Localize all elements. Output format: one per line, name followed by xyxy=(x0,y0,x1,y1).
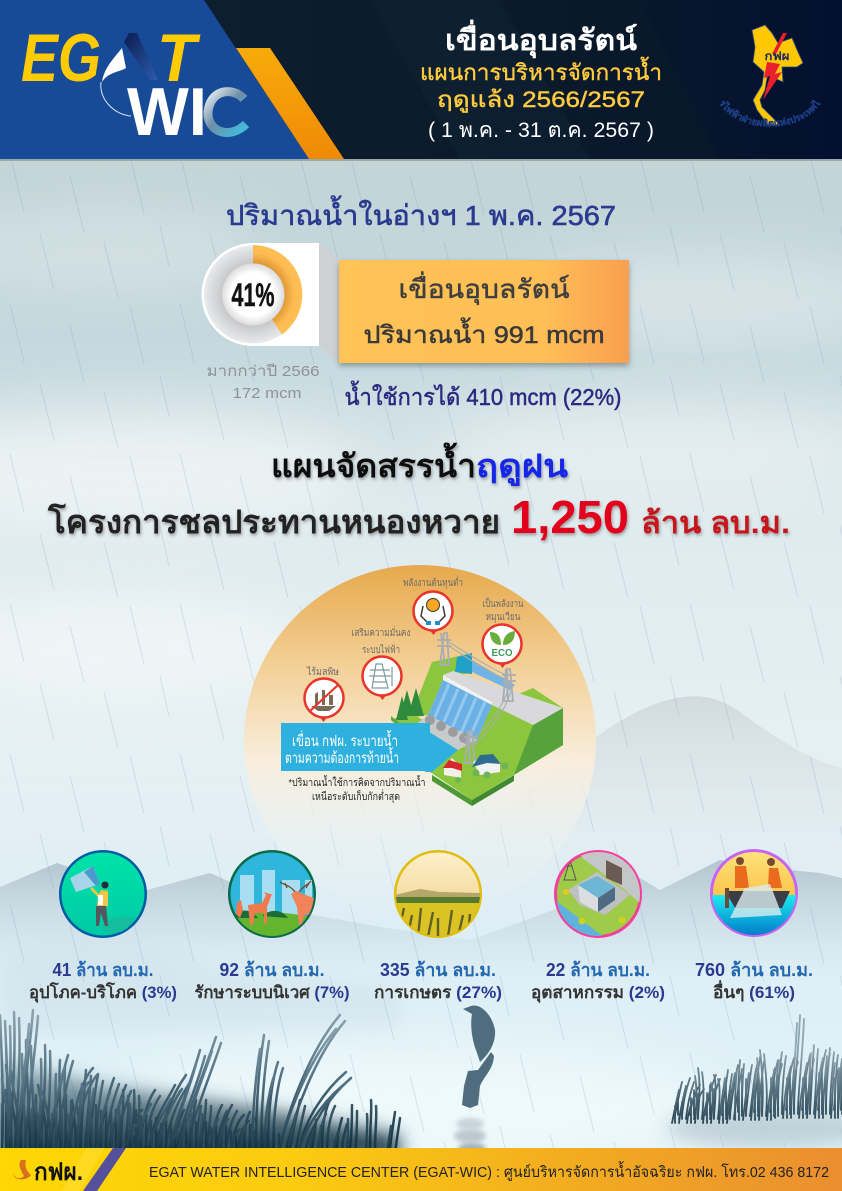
stat: agriculture: การเกษตร (27%) xyxy=(374,983,502,1002)
circle backdrop for dam xyxy=(244,565,596,917)
heading: rainy season allocation plan: แผนจัดสรรน้ำ xyxy=(271,442,476,484)
illustration: heron on stump xyxy=(454,1006,495,1153)
header title block: ฤดูแล้ง 2566/2567 xyxy=(437,87,645,113)
stat: industry: อุตสาหกรรม (2%) xyxy=(531,983,665,1003)
header blue panel xyxy=(0,0,309,159)
stat: consumption xyxy=(29,960,177,1003)
illustration: left reeds xyxy=(0,1010,400,1162)
gauge: 41 percent: 41% xyxy=(232,277,274,313)
pin: renewable energy: ECO xyxy=(492,648,513,659)
heading: reservoir volume: ปริมาณน้ำในอ่างฯ 1 พ.ค. 2567 xyxy=(226,195,616,231)
banner: EGAT dam releases water: เขื่อน กฟผ. ระบายน้ำ xyxy=(292,730,398,750)
heading: irrigation project amount: 1,250 xyxy=(511,491,629,543)
stat: other uses: อื่นๆ (61%) xyxy=(713,980,795,1002)
banner: EGAT dam releases water: ตามความต้องการท้ายน้ำ xyxy=(285,747,399,767)
callout: dam volume box xyxy=(339,260,629,363)
pin: low cost energy: พลังงานต้นทุนต่ำ xyxy=(403,575,463,589)
gauge: 41 percent xyxy=(202,243,339,363)
header banner xyxy=(0,0,842,161)
callout: dam volume box: ปริมาณน้ำ 991 mcm xyxy=(364,317,604,349)
EGAT seal: Thailand map xyxy=(720,24,820,127)
banner: EGAT dam releases water xyxy=(281,723,430,771)
pin: no pollution: ไร้มลพิษ xyxy=(306,666,339,678)
illustration: right reeds xyxy=(665,1015,842,1148)
text: usable water: น้ำใช้การได้ 410 mcm (22%) xyxy=(344,381,622,410)
pin: renewable energy: เป็นพลังงาน xyxy=(482,596,524,610)
pin: no pollution xyxy=(304,666,344,722)
pin: power system security xyxy=(352,625,411,700)
stat: consumption: อุปโภค-บริโภค (3%) xyxy=(29,982,177,1003)
logo: EGAT WIC: EG xyxy=(21,20,101,96)
heading: irrigation project amount: ล้าน ลบ.ม. xyxy=(641,507,790,540)
footer logo: EGAT: กฟผ. xyxy=(34,1159,83,1186)
footnote: เหนือระดับเก็บกักต่ำสุด xyxy=(312,789,400,803)
stat: other uses: 760 ล้าน ลบ.ม. xyxy=(695,960,813,980)
stat: industry: 22 ล้าน ลบ.ม. xyxy=(546,960,650,980)
dam: water xyxy=(415,723,458,772)
stat: industry xyxy=(531,960,665,1003)
dam: left tree platform xyxy=(391,712,432,734)
text: more than 2566: มากกว่าปี 2566 xyxy=(206,363,320,380)
header title block: แผนการบริหารจัดการน้ำ xyxy=(420,57,662,85)
header orange stripe xyxy=(236,48,344,159)
stat: agriculture: 335 ล้าน ลบ.ม. xyxy=(380,960,496,980)
icon: industry xyxy=(554,850,642,945)
footnote: *ปริมาณน้ำใช้การคิดจากปริมาณน้ำ xyxy=(288,775,426,789)
pin: low cost energy xyxy=(403,575,463,635)
stat: agriculture xyxy=(374,960,502,1002)
text: more than 2566 xyxy=(206,363,320,402)
footer purple stripe xyxy=(83,1148,126,1191)
dam: trees xyxy=(396,688,424,720)
heading: irrigation project amount: โครงการชลประทานหนองหวาย xyxy=(47,503,500,540)
pin: power system security: เสริมความมั่นคง xyxy=(352,625,411,639)
dam: powerhouse xyxy=(415,715,477,750)
heading: rainy season allocation plan: ฤดูฝน xyxy=(476,448,568,487)
stat: other uses xyxy=(695,960,813,1002)
pin: renewable energy xyxy=(482,596,524,668)
icon: agriculture xyxy=(394,850,483,938)
icon: ecosystem xyxy=(228,850,316,938)
footer logo: EGAT xyxy=(13,1159,83,1186)
dam: crest xyxy=(443,671,563,725)
stat: ecosystem xyxy=(194,960,350,1002)
icon: consumption xyxy=(59,850,147,938)
pin: renewable energy: หมุนเวียน xyxy=(486,611,521,623)
heading: rainy season allocation plan xyxy=(271,442,568,487)
icon: other uses, fishing xyxy=(710,849,800,937)
stat: ecosystem: 92 ล้าน ลบ.ม. xyxy=(220,960,324,980)
dam: left hill and reservoir xyxy=(410,653,472,718)
illustration: hydro dam xyxy=(391,633,563,806)
pin: power system security: ระบบไฟฟ้า xyxy=(362,644,400,656)
heading: irrigation project amount xyxy=(47,491,790,543)
dam: transmission towers and lines xyxy=(437,633,516,763)
header title block xyxy=(420,19,662,142)
logo: EGAT WIC xyxy=(21,20,246,150)
text: more than 2566: 172 mcm xyxy=(232,385,302,402)
header title block: ( 1 พ.ค. - 31 ต.ค. 2567 ) xyxy=(428,119,654,142)
logo: EGAT WIC: WI xyxy=(127,74,207,150)
footer bar xyxy=(0,1148,842,1191)
dam: main green hill xyxy=(430,688,563,800)
stat: consumption: 41 ล้าน ลบ.ม. xyxy=(52,960,154,980)
EGAT seal: Thailand map: กฟผ xyxy=(764,50,790,63)
dam: spillway xyxy=(428,680,492,740)
stat: ecosystem: รักษาระบบนิเวศ (7%) xyxy=(194,983,350,1002)
header title block: เขื่อนอุบลรัตน์ xyxy=(445,19,637,58)
callout: dam volume box: เขื่อนอุบลรัตน์ xyxy=(398,271,570,305)
footnote xyxy=(288,775,426,803)
logo: EGAT WIC: T xyxy=(157,20,201,96)
dam: houses xyxy=(444,758,461,778)
